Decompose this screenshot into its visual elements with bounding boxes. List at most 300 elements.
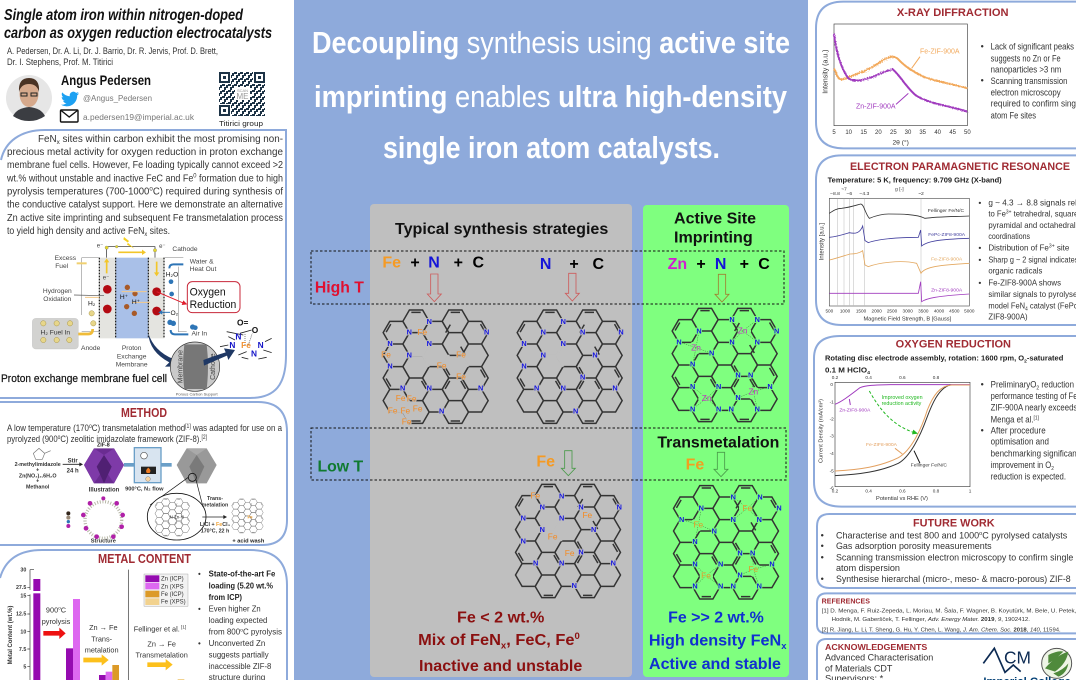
ORR polarization chart: -5 xyxy=(830,468,834,473)
fuel cell labels: H₂ xyxy=(88,301,96,308)
method text: A low temperature (170 xyxy=(7,422,104,433)
introduction text: o xyxy=(149,186,153,192)
low temperature dotted band xyxy=(311,428,786,480)
2-methylimidazole precursors: + xyxy=(36,467,39,473)
molecule: Zn imprinted product: N xyxy=(755,337,760,346)
molecule: Fe N C product: Fe xyxy=(417,327,428,337)
molecule: Fe N C product: Fe xyxy=(413,404,423,414)
molecule: Fe transmetalated: Fe xyxy=(748,564,759,574)
EPR chart: −4.3 xyxy=(859,191,869,197)
precursors: N C: + xyxy=(569,256,579,273)
FeN4 active site: Fe xyxy=(241,340,251,350)
ZIF-8 crystal structure xyxy=(66,496,125,545)
future work list: atom dispersion xyxy=(836,563,900,573)
XRD bullets: • xyxy=(981,41,984,51)
label: transmetalation: Transmetalation xyxy=(657,435,779,452)
panel: typical synthesis strategies xyxy=(370,204,632,677)
metal content bullets: • xyxy=(198,604,201,613)
EPR chart: 1500 xyxy=(856,309,867,314)
panel: electron paramagnetic resonance xyxy=(816,155,1076,325)
molecule: Fe impregnated: N xyxy=(521,514,526,523)
molecule: Zn imprinted product: N xyxy=(748,371,753,380)
molecule: Zn imprinted product: N xyxy=(735,371,741,380)
molecule: N C product: N xyxy=(534,384,539,393)
legend: Fe (ICP) xyxy=(161,592,184,598)
XRD chart: 40 xyxy=(934,130,942,136)
bars xyxy=(32,579,184,680)
molecule: Zn imprinted product: Zn xyxy=(691,342,701,352)
chart annotations xyxy=(42,605,188,659)
molecule: Fe N C product: Fe xyxy=(456,350,466,360)
arrow: Fe addition grey xyxy=(561,451,575,476)
water and air paths xyxy=(169,264,183,268)
heading: metal content: METAL CONTENT xyxy=(98,552,191,566)
molecule: Fe N C product: N xyxy=(478,384,483,393)
molecule: Fe impregnated: N xyxy=(559,491,564,500)
ORR polarization chart: 0.2 xyxy=(832,375,839,380)
arrow: to active site xyxy=(203,348,235,366)
molecule: Fe impregnated: N xyxy=(559,558,564,567)
molecule: Fe transmetalated: N xyxy=(757,492,763,501)
outcome: typical synthesis: , FeC, Fe xyxy=(506,632,575,649)
arrows xyxy=(43,628,66,639)
proton exchange membrane xyxy=(116,258,148,338)
XRD bullets: nanoparticles >3 nm xyxy=(991,64,1061,74)
metal content bullets: suggests partially xyxy=(209,651,269,660)
EPR chart: 3500 xyxy=(918,309,929,314)
precursors: N C: C xyxy=(593,256,605,273)
fuel cell labels: Excess xyxy=(55,255,77,262)
arrow: Fe route xyxy=(427,274,441,302)
XRD chart: Intensity (a.u.) xyxy=(822,50,829,94)
fuel cell labels: Oxidation xyxy=(43,296,72,303)
XRD chart: 10 xyxy=(845,130,853,136)
transmetalation step: 170°C, 22 h xyxy=(201,528,229,534)
acknowledgement text: Advanced Characterisation xyxy=(825,653,933,663)
transmetalation step: metalation xyxy=(202,503,228,509)
precursors: Zn N C: Zn xyxy=(668,256,687,273)
2-methylimidazole precursors xyxy=(15,448,83,490)
molecule: Zn imprinted product: N xyxy=(755,404,760,413)
ORR polarization chart: 0.4 xyxy=(865,489,872,494)
outcome: typical synthesis: x xyxy=(501,640,507,650)
XRD bullets: electron microscopy xyxy=(991,87,1061,97)
XRD bullets: atom Fe sites xyxy=(991,110,1036,120)
metal content bullets: • xyxy=(198,639,201,648)
EPR bullets: 4 xyxy=(1025,306,1028,312)
reference list: [2] R. Jiang, L. Li, T. Sheng, G. Hu, Y. Chen, L. Wang, J. Am. Chem. Soc. 2018, 140, 11594. xyxy=(822,628,1061,634)
molecule: Zn imprinted product: N xyxy=(690,382,695,391)
molecule: Fe impregnated: Fe xyxy=(582,510,593,520)
legend: Zn (XPS xyxy=(161,584,184,590)
icon: envelope xyxy=(60,110,78,122)
EPR chart: 500 xyxy=(825,309,834,314)
ORR polarization chart: 0 xyxy=(830,382,833,387)
fuel cell labels: Exchange xyxy=(117,353,147,360)
molecule: Zn imprinted product: N xyxy=(755,315,760,324)
ORR bullets: optimisation and xyxy=(991,437,1049,447)
molecule: Fe impregnated: N xyxy=(578,547,584,556)
ORR bullets xyxy=(981,379,1076,481)
panel: acknowledgements xyxy=(817,639,1076,680)
EPR bullets: 3+ xyxy=(1006,209,1011,215)
XRD chart: 20 xyxy=(875,130,882,136)
2-methylimidazole precursors: 2-methylimidazole xyxy=(15,462,61,468)
molecule: Fe N C product: N xyxy=(407,328,412,337)
heading: active site imprinting xyxy=(674,210,756,247)
ORR bullets: After procedure xyxy=(991,425,1046,435)
introduction text: sites within carbon exhibit the most promising non- xyxy=(60,134,283,145)
fuel cell labels: Cathode xyxy=(172,246,198,253)
lower central scheme xyxy=(317,435,787,675)
EPR bullets: Distribution of Fe xyxy=(988,243,1052,253)
zoomed Zn site molecule xyxy=(147,493,206,540)
magnified porous carbon circle: Cathode xyxy=(210,353,217,380)
molecule: Fe N C product: Fe xyxy=(381,350,391,360)
molecule: Fe transmetalated: N xyxy=(731,492,736,501)
molecule: Fe N C product: N xyxy=(407,350,412,359)
metal content bar chart: 30 xyxy=(20,568,26,574)
introduction text: x xyxy=(57,139,61,146)
logo: Titirici group leaf xyxy=(1042,648,1072,678)
outcome: active site imprinting xyxy=(649,609,787,673)
FeN4 active site xyxy=(220,318,272,359)
callout: oxygen reduction: Oxygen xyxy=(190,286,226,298)
ORR polarization chart: -2 xyxy=(830,417,834,422)
future work list: • xyxy=(821,553,824,563)
arrow: zoom to electrode xyxy=(148,333,178,367)
ORR bullets: Menga et al. xyxy=(991,414,1040,424)
panel: central blue background xyxy=(294,0,808,680)
future work list: C pyrolysed catalysts xyxy=(982,530,1068,540)
molecule: Zn imprinted product: N xyxy=(735,393,741,402)
FeN4 active site: N xyxy=(229,340,235,350)
EPR chart: 4500 xyxy=(949,309,960,314)
EPR chart: 3000 xyxy=(902,309,913,314)
molecule: Zn imprinted product: Zn xyxy=(748,386,759,396)
future work list: • xyxy=(821,530,824,540)
authors xyxy=(7,46,218,67)
label: low T: Low T xyxy=(317,459,363,476)
panel: metal content xyxy=(0,550,287,680)
heading: typical synthesis strategies: Typical synthesis strategies xyxy=(395,221,608,238)
molecule: Zn imprinted product: N xyxy=(729,404,734,413)
ORR conditions: -saturated xyxy=(1027,354,1064,363)
molecule: Fe impregnated: N xyxy=(578,502,584,511)
XRD chart: 2θ (°) xyxy=(892,139,909,147)
label: Fe addition green: Fe xyxy=(686,456,704,473)
molecule: Fe impregnated: N xyxy=(540,502,545,511)
molecule: Fe transmetalated: N xyxy=(731,515,736,524)
outcome: typical synthesis: Inactive and unstable xyxy=(419,658,582,675)
pyrolysed grey crystal xyxy=(177,448,217,483)
2-methylimidazole precursors: Zn(NO₃)₂.6H₂O xyxy=(19,473,57,479)
chart annotations: Transmetalation xyxy=(136,650,188,659)
legend: Zn (ICP) xyxy=(161,577,184,583)
ORR polarization chart: 0.8 xyxy=(933,375,940,380)
metal content bar chart: 7.5 xyxy=(19,647,26,653)
molecule: Zn imprinted product xyxy=(672,308,779,422)
QR caption: Titirici group xyxy=(219,119,263,128)
precursors: Zn N C: + xyxy=(696,256,706,273)
future work list: Scanning transmission electron microscopy to confirm single xyxy=(836,553,1073,563)
molecule: Fe impregnated: Fe xyxy=(565,548,575,558)
fuel cell labels: Fuel xyxy=(55,263,69,270)
icon: QR code: ME xyxy=(236,92,248,101)
callout: oxygen reduction: Reduction xyxy=(190,299,236,311)
EPR chart: Magnetic Field Strength, B [Gauss] xyxy=(863,316,952,322)
title xyxy=(4,7,272,42)
XRD chart: 15 xyxy=(860,130,868,136)
ORR polarization chart: Fellinger Fe/N/C xyxy=(911,463,947,469)
EPR bullets: ZIF8-900A) xyxy=(988,312,1028,322)
EPR bullets: to Fe xyxy=(988,208,1008,218)
molecule: N C product: N xyxy=(592,350,598,359)
panel: active site imprinting xyxy=(643,205,789,677)
molecule: Zn imprinted product: N xyxy=(690,404,695,413)
fuel cell labels: Anode xyxy=(81,345,101,352)
tube furnace xyxy=(124,448,172,493)
molecule: Zn imprinted product: N xyxy=(716,382,721,391)
future work list xyxy=(821,530,1073,584)
ORR polarization chart: Fe-ZIF8-900A xyxy=(866,442,898,448)
molecule: Fe N C product: N xyxy=(387,361,393,370)
method text: C) transmetalation method xyxy=(92,422,185,433)
heading: active site imprinting: Imprinting xyxy=(674,230,753,247)
XRD chart: 35 xyxy=(919,130,927,136)
EPR bullets: • xyxy=(978,277,981,287)
introduction text: the conductive catalyst support. Here we demonstrate an alternative xyxy=(7,200,283,210)
future work list: Gas adsorption porosity measurements xyxy=(836,541,992,551)
molecule: N C product: N xyxy=(521,361,527,370)
fuel cell labels: Proton xyxy=(122,345,142,352)
XRD chart: 5 xyxy=(832,130,836,136)
2-methylimidazole precursors: Stir xyxy=(68,458,78,464)
precursors: Zn N C: + xyxy=(740,256,749,273)
molecule: Fe transmetalated: Fe xyxy=(693,519,704,529)
ORR polarization chart: Zn-ZIF8-900A xyxy=(839,408,871,414)
future work list: Characterise and test 800 and 1000 xyxy=(836,530,982,540)
fuel cell labels: H₂ Fuel In xyxy=(41,330,70,337)
ORR bullets: [1] xyxy=(1034,415,1039,421)
logo: ACM xyxy=(983,647,1031,672)
authors: Dr. I. Stephens, Prof. M. Titirici xyxy=(7,57,113,67)
callout: oxygen reduction xyxy=(187,282,240,313)
label: Fe addition grey: Fe xyxy=(536,454,555,471)
EPR conditions: Temperature: 5 K, frequency: 9.709 GHz (X-band) xyxy=(828,176,1002,185)
molecule: Fe N C product: N xyxy=(484,328,489,337)
chart annotations: Fellinger et al. xyxy=(134,624,180,633)
precursors: Zn N C: C xyxy=(758,256,770,273)
molecule: Fe transmetalated: N xyxy=(737,548,743,557)
chart annotations: 900 xyxy=(46,605,58,614)
precursors: Fe N C: Fe xyxy=(382,255,401,272)
metal content bullets: • xyxy=(198,570,201,579)
heading: oxygen reduction: OXYGEN REDUCTION xyxy=(896,338,1011,350)
EPR chart: 1000 xyxy=(840,309,851,314)
method text: C) zeolitic imidazolate framework (ZIF-8). xyxy=(60,433,202,444)
molecule: N C product: N xyxy=(561,384,566,393)
label: porous carbon support: Porous Carbon Support xyxy=(176,392,218,397)
molecule: N C product: N xyxy=(580,372,585,381)
molecule: N C product xyxy=(517,310,624,423)
EPR chart xyxy=(819,187,975,322)
panel: future work xyxy=(817,514,1076,588)
icon: twitter bird xyxy=(61,92,79,106)
ORR bullets: PreliminaryO xyxy=(991,379,1043,389)
magnification callout lines xyxy=(150,477,203,508)
heading: x-ray diffraction: X-RAY DIFFRACTION xyxy=(897,7,1009,19)
molecule: N C product: N xyxy=(612,384,618,393)
ORR bullets: • xyxy=(981,379,984,389)
fuel cell labels: e⁻ xyxy=(97,243,103,249)
molecule: Fe N C product: Fe xyxy=(396,393,406,403)
metal content bullets: loading expected xyxy=(209,616,267,625)
molecule: Zn imprinted product: N xyxy=(690,360,695,369)
ORR conditions: 2 xyxy=(1024,358,1027,364)
molecule: Fe transmetalated: N xyxy=(679,515,684,524)
arrow: N route xyxy=(565,273,579,301)
2-methylimidazole precursors: Methanol xyxy=(26,484,50,490)
future work list: Synthesise hierarchal (micro-, meso- & macro-porous) ZIF-8 xyxy=(836,574,1071,584)
ORR polarization chart: 0.2 xyxy=(832,489,839,494)
molecule: N C product: N xyxy=(521,339,527,348)
introduction text: to yield high density and active FeN xyxy=(7,226,165,237)
XRD chart: 45 xyxy=(949,130,957,136)
EPR chart: Intensity [a.u.] xyxy=(819,223,825,260)
metal content bar chart: 27.5 xyxy=(16,585,26,591)
metal content bullets: Even higher Zn xyxy=(209,604,261,613)
molecule: Fe transmetalated xyxy=(673,486,782,599)
precursors: Fe N C xyxy=(382,255,485,272)
introduction text: wt.% without unstable and inactive FeC and Fe xyxy=(7,174,215,184)
outcome: active site imprinting: High density FeN xyxy=(649,633,779,650)
EPR chart: 2500 xyxy=(887,309,898,314)
EPR bullets: • xyxy=(978,243,981,253)
ORR bullets: improvement in O xyxy=(991,460,1062,470)
fuel cell labels: e⁻ xyxy=(103,275,109,281)
fuel cell labels: Water & xyxy=(190,258,214,265)
EPR chart: FePc-ZIF8-900A xyxy=(928,232,966,238)
chart annotations: Trans- xyxy=(91,635,113,644)
axis xyxy=(27,570,128,680)
chart annotations: Zn → Fe xyxy=(147,639,176,648)
molecule: Fe transmetalated: N xyxy=(692,582,698,591)
reference list: [1] D. Menga, F. Ruiz-Zepeda, L. Moriau, M. Šala, F. Wagner, B. Koyutürk, M. Bele, U. Petek, M. xyxy=(822,607,1076,614)
molecule: Fe transmetalated: N xyxy=(712,526,717,535)
heading: references: REFERENCES xyxy=(822,598,870,605)
FeN4 active site: N xyxy=(251,348,257,358)
introduction text: sites. xyxy=(147,226,170,237)
metal content bar chart: 5 xyxy=(23,665,26,671)
molecule: Zn imprinted product: N xyxy=(729,337,735,346)
chart annotations: metalation xyxy=(85,646,119,655)
EPR bullets: • xyxy=(978,254,981,264)
precursors: Zn N C xyxy=(668,256,770,273)
transmetalation step: LiCl + FeCl₃ xyxy=(200,522,231,528)
panel: references xyxy=(817,593,1076,634)
heading: proton exchange membrane fuel cell: Proton exchange membrane fuel cell xyxy=(1,373,167,385)
method text: [1] xyxy=(185,424,191,430)
legend: Fe (XPS) xyxy=(161,600,186,606)
panel: x-ray diffraction xyxy=(816,2,1076,148)
molecule: Fe transmetalated: N xyxy=(692,537,698,546)
metal content bar chart: 12.5 xyxy=(16,612,26,618)
fuel cell labels: O₂ xyxy=(170,310,179,317)
fuel cell labels: Membrane xyxy=(116,362,148,369)
EPR bullets: model FeN xyxy=(988,301,1030,311)
fuel cell labels: Heat Out xyxy=(190,266,216,273)
legend xyxy=(144,574,188,606)
fuel cell labels xyxy=(41,243,216,369)
introduction text: precious metal activity for oxygen reduction in proton exchange xyxy=(7,147,283,158)
2-methylimidazole precursors: 24 h xyxy=(67,469,79,475)
EPR bullets: 3+ xyxy=(1049,244,1055,250)
headline: single iron atom catalysts. xyxy=(383,130,720,165)
EPR bullets: organic radicals xyxy=(988,266,1042,276)
molecule: Fe impregnated: N xyxy=(572,581,577,590)
molecule: Fe N C product: N xyxy=(400,384,405,393)
precursors: Fe N C: N xyxy=(428,255,440,272)
molecule: Fe impregnated: N xyxy=(611,558,616,567)
method synthesis diagram xyxy=(15,443,265,545)
email address: a.pedersen19@imperial.ac.uk xyxy=(83,112,195,122)
icon: presenter photo xyxy=(6,75,52,121)
magnified porous carbon circle: Membrane xyxy=(177,350,184,383)
molecule: Fe impregnated: N xyxy=(591,525,596,534)
title: Single atom iron within nitrogen-doped xyxy=(4,7,243,24)
metal content bar chart: 15 xyxy=(20,594,26,600)
molecule: Fe transmetalated: N xyxy=(718,560,723,569)
EPR chart: ~2 xyxy=(918,191,924,197)
molecule: Fe transmetalated: Fe xyxy=(701,570,711,580)
heading: EPR: ELECTRON PARAMAGNETIC RESONANCE xyxy=(850,161,1070,173)
headline: imprinting enables ultra high-density xyxy=(314,79,788,114)
introduction text: membrane fuel cells. However, Fe loading typically cannot exceed >2 xyxy=(7,160,283,171)
future work list: • xyxy=(821,541,824,551)
lightning bolt xyxy=(123,237,134,249)
molecule: Zn imprinted product: N xyxy=(774,326,779,335)
proton spheres xyxy=(124,285,138,316)
molecule: Fe N C product: Fe xyxy=(400,406,411,416)
ZIF-8 crystal structure: Structure xyxy=(91,539,116,545)
acknowledgement text: of Materials CDT xyxy=(825,664,893,674)
panel: method xyxy=(0,402,287,545)
ORR conditions: 4 xyxy=(867,370,870,376)
method text: was adapted for use on a xyxy=(191,422,283,433)
EPR chart: −6 xyxy=(846,191,852,197)
molecule: N C product: N xyxy=(573,406,578,415)
icon: QR code: SCAN xyxy=(237,88,248,93)
ORR bullets: 2 xyxy=(1036,385,1039,391)
catalyst sites xyxy=(103,285,161,315)
Fe site molecule: Fe xyxy=(247,514,253,519)
ORR conditions xyxy=(825,354,1064,376)
introduction text: FeN xyxy=(38,134,57,145)
heading: method: METHOD xyxy=(121,405,167,420)
outcome: active site imprinting: Fe >> 2 wt.% xyxy=(668,609,764,626)
twitter handle: @Angus_Pedersen xyxy=(83,93,152,103)
icon: QR code xyxy=(218,71,266,117)
outcome: active site imprinting: Active and stable xyxy=(649,656,781,673)
molecule: Fe transmetalated: N xyxy=(750,548,755,557)
EPR bullets: site xyxy=(1055,243,1070,253)
introduction text: pyrolysis temperatures (700-1000 xyxy=(7,186,156,198)
chart annotations: o xyxy=(58,606,61,611)
EPR chart: −8.8 xyxy=(830,191,840,197)
precursors: Fe N C: + xyxy=(454,255,463,272)
outcome: typical synthesis xyxy=(418,609,582,675)
